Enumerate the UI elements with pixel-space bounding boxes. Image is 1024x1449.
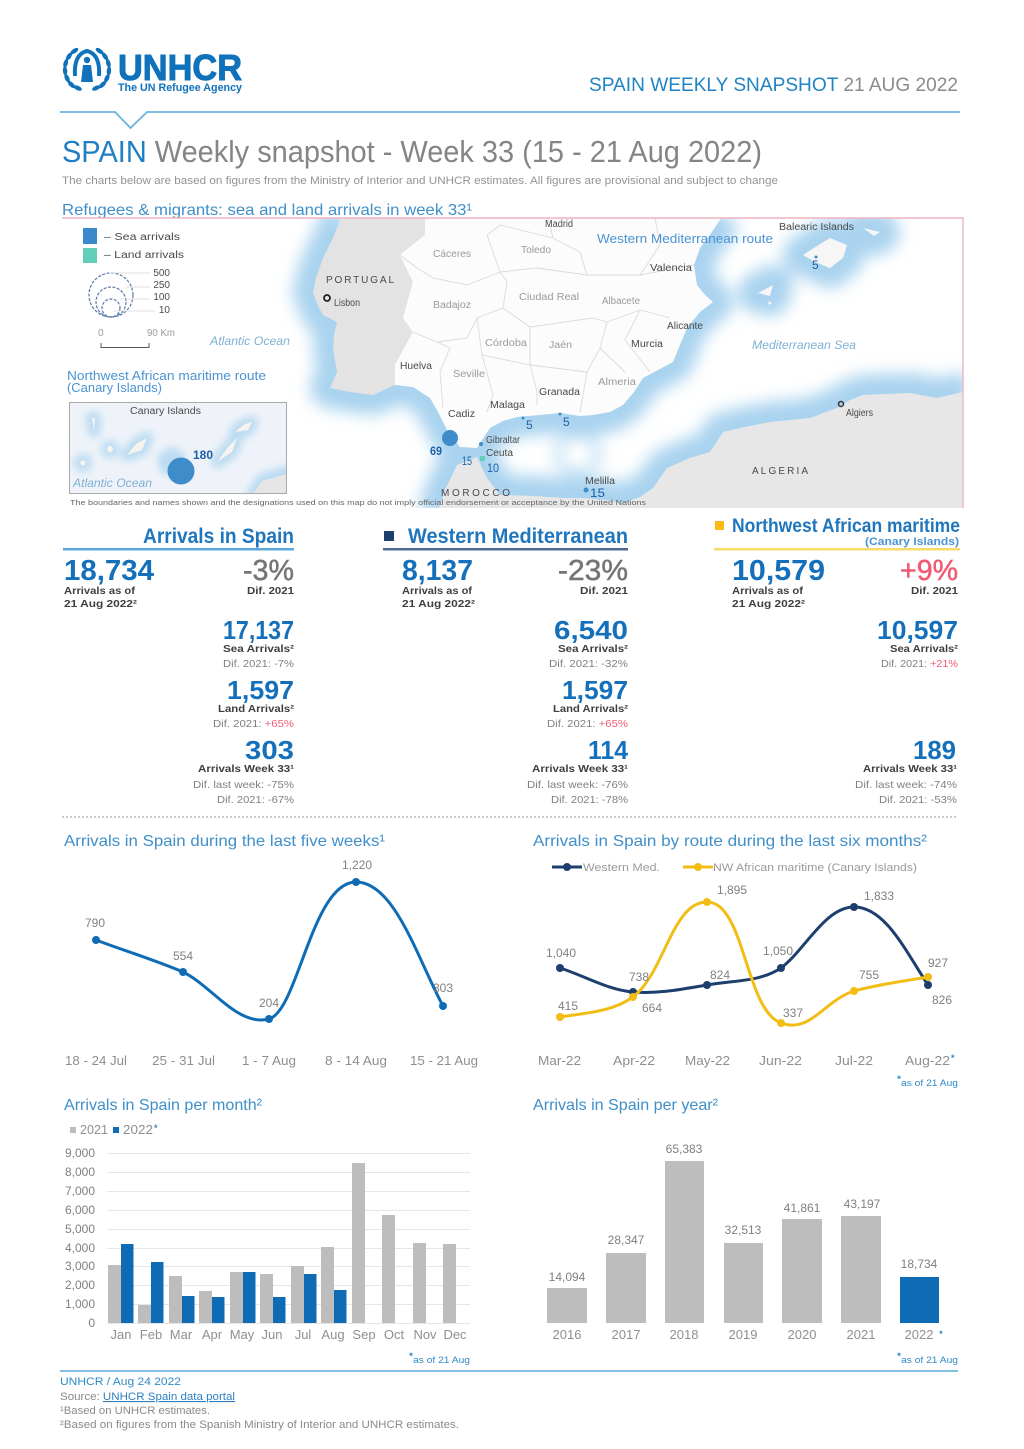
inset map: Canary Islands: 180 [193, 448, 213, 462]
legend: * [154, 1123, 158, 1133]
x axis labels: 2022 [905, 1327, 933, 1342]
icon: UNHCR emblem [62, 47, 112, 92]
y axis and grid: 5,000 [65, 1222, 95, 1236]
total arrivals [64, 555, 154, 610]
y axis and grid: 4,000 [65, 1241, 95, 1255]
weekly arrivals: Dif. 2021: -78% [551, 794, 628, 806]
weekly arrivals [193, 735, 295, 806]
inset map: Canary Islands: Atlantic Ocean [72, 476, 152, 490]
label: Northwest African route: Northwest African maritime route [67, 368, 266, 383]
land arrivals: Land Arrivals² [218, 704, 295, 715]
heading: Arrivals in Spain [143, 525, 294, 548]
weekly arrivals: Arrivals Week 33¹ [198, 764, 295, 775]
sea arrivals: Dif. 2021: +21% [881, 658, 958, 670]
x axis labels: May [230, 1327, 255, 1342]
data labels: 415 [558, 999, 578, 1013]
series: NW African maritime [556, 898, 932, 1027]
sea arrivals: Sea Arrivals² [223, 644, 295, 655]
map labels: cities and countries [326, 219, 873, 499]
x axis labels [553, 1327, 943, 1342]
x axis labels: Dec [443, 1327, 467, 1342]
map labels: cities and countries: Albacete [602, 296, 640, 307]
map labels: seas and routes [597, 231, 856, 352]
weekly arrivals: 189 [913, 735, 956, 765]
note: * [897, 1351, 902, 1361]
legend: proportional circles: 100 [153, 292, 170, 303]
total arrivals: 21 Aug 2022² [64, 599, 138, 610]
data labels: 1,220 [342, 858, 372, 872]
footnote 1: ¹Based on UNHCR estimates. [60, 1405, 210, 1417]
map symbols: arrival figures: 5 [812, 258, 819, 272]
footer rule [60, 1370, 958, 1372]
data labels: 65,383 [666, 1142, 703, 1156]
weekly arrivals: Dif. last week: -74% [855, 779, 957, 791]
bars 2022 [121, 1244, 346, 1323]
land arrivals: Dif. 2021: +65% [213, 718, 294, 730]
legend: scale bar [98, 328, 175, 348]
legend: proportional circles [89, 268, 170, 317]
panel: line chart by route [533, 833, 958, 1088]
panel: Western Mediterranean [383, 525, 629, 806]
x axis labels: 2019 [729, 1327, 757, 1342]
legend: scale bar: 0 [98, 328, 104, 339]
x axis labels [65, 1053, 478, 1068]
source: Source: UNHCR Spain data portal [60, 1391, 235, 1403]
map base with sea glow and land [313, 215, 970, 515]
map labels: seas and routes: Western Mediterranean route [597, 231, 773, 246]
data labels: 303 [433, 981, 453, 995]
x axis labels: Aug-22 [905, 1053, 950, 1068]
map labels: cities and countries: ALGERIA [752, 466, 808, 477]
x axis labels [538, 1053, 955, 1068]
map frame [62, 218, 963, 508]
logo wordmark: UNHCR [118, 47, 242, 88]
sea arrivals [223, 615, 295, 670]
map labels: cities and countries: Valencia [650, 263, 692, 274]
x axis labels: Feb [140, 1327, 162, 1342]
map labels: cities and countries: PORTUGAL [326, 275, 394, 286]
x axis labels: 2020 [788, 1327, 816, 1342]
legend: Western Med. [583, 862, 660, 874]
weekly arrivals: Arrivals Week 33¹ [863, 764, 958, 775]
subtitle: The charts below are based on figures from the Ministry of Interior and UNHCR estimates. All figures are provisional and subject to change [62, 175, 778, 187]
note: as of 21 Aug [901, 1355, 958, 1365]
weekly arrivals: Dif. 2021: -53% [879, 794, 957, 806]
series: Western Mediterranean [556, 903, 932, 996]
chart heading: Arrivals in Spain per month² [64, 1097, 263, 1114]
chart heading: Arrivals in Spain by route during the last six months² [533, 833, 928, 850]
x axis labels: 25 - 31 Jul [152, 1053, 215, 1068]
legend: 2021 [80, 1122, 108, 1137]
x axis labels: 8 - 14 Aug [325, 1053, 387, 1068]
data labels: 41,861 [784, 1201, 821, 1215]
difference 2021: -3% [243, 555, 294, 587]
heading: (Canary Islands) [865, 536, 959, 548]
weekly arrivals: 114 [588, 735, 629, 765]
date line: UNHCR / Aug 24 2022 [60, 1376, 181, 1388]
legend: proportional circles: 500 [153, 268, 170, 279]
label: Atlantic Ocean: Atlantic Ocean [209, 334, 290, 348]
data labels: 14,094 [549, 1270, 586, 1284]
panel: arrivals map [62, 215, 970, 515]
chart heading: Arrivals in Spain per year² [533, 1097, 719, 1114]
bars 2021 [108, 1163, 456, 1323]
total arrivals: Arrivals as of [732, 586, 804, 597]
map symbols: arrival figures [324, 256, 844, 500]
map symbols: arrival figures: 15 [462, 454, 472, 468]
x axis labels: * [939, 1329, 943, 1339]
weekly arrivals: Dif. last week: -75% [193, 779, 294, 791]
x axis labels: Mar [170, 1327, 193, 1342]
map labels: cities and countries: Madrid [545, 219, 573, 230]
legend: 2022 [123, 1122, 153, 1137]
x axis labels: Jul [295, 1327, 311, 1342]
y axis and grid: 7,000 [65, 1184, 95, 1198]
x axis labels: 2017 [612, 1327, 640, 1342]
heading: Western Mediterranean [408, 525, 628, 548]
data labels: 43,197 [844, 1197, 881, 1211]
x axis labels: Sep [352, 1327, 376, 1342]
panel: bars per month [64, 1097, 470, 1365]
map labels: cities and countries: Melilla [585, 476, 615, 487]
y axis and grid: 8,000 [65, 1165, 95, 1179]
sea arrivals: Dif. 2021: -7% [223, 658, 294, 670]
map labels: cities and countries: Lisbon [334, 298, 360, 309]
land arrivals: 1,597 [227, 675, 294, 705]
x axis labels: 2021 [847, 1327, 875, 1342]
y axis and grid: 2,000 [65, 1278, 95, 1292]
x axis labels: Nov [413, 1327, 437, 1342]
data labels: 927 [928, 956, 948, 970]
sea arrivals [549, 615, 629, 670]
x axis labels: Apr-22 [613, 1053, 655, 1068]
x axis labels: 15 - 21 Aug [410, 1053, 478, 1068]
heading [714, 516, 960, 550]
footer notes [60, 1376, 459, 1431]
sea arrivals: Sea Arrivals² [890, 644, 959, 655]
map labels: seas and routes: Mediterranean Sea [752, 338, 856, 352]
sea arrivals: Dif. 2021: -32% [549, 658, 628, 670]
map labels: cities and countries: Almeria [598, 377, 636, 388]
note: * [897, 1074, 902, 1084]
map symbols: arrival figures: 5 [563, 415, 570, 429]
difference 2021: -23% [558, 555, 628, 587]
x axis labels: 18 - 24 Jul [65, 1053, 127, 1068]
difference 2021: Dif. 2021 [580, 586, 629, 597]
legend: scale bar: 90 Km [147, 328, 175, 339]
x axis labels: * [951, 1053, 955, 1063]
legend: NW African maritime (Canary Islands) [713, 862, 917, 874]
x axis labels: Jul-22 [835, 1053, 873, 1068]
legend: symbol colours: – Sea arrivals [104, 232, 180, 243]
line series [92, 878, 447, 1023]
map labels: cities and countries: Toledo [521, 245, 551, 256]
total arrivals [402, 555, 476, 610]
data labels: 1,833 [864, 889, 894, 903]
data labels: 824 [710, 968, 730, 982]
x axis labels: 2016 [553, 1327, 581, 1342]
map labels: cities and countries: Murcia [631, 339, 663, 350]
data labels: 32,513 [725, 1223, 762, 1237]
title: SPAIN Weekly snapshot - Week 33 (15 - 21 Aug 2022) [62, 134, 762, 169]
x axis labels: Jan [111, 1327, 131, 1342]
map labels: cities and countries: Ceuta [486, 448, 513, 459]
label: Northwest African route [67, 368, 266, 395]
x axis labels: Aug [321, 1327, 345, 1342]
data labels [85, 858, 453, 1010]
legend [70, 1122, 158, 1137]
map labels: cities and countries: Balearic Islands [779, 222, 854, 233]
map labels: cities and countries: Jaén [549, 340, 572, 351]
x axis labels [111, 1327, 467, 1342]
map labels: cities and countries: Badajoz [433, 300, 471, 311]
panel: bars per year [533, 1097, 958, 1365]
land arrivals: Dif. 2021: +65% [547, 718, 628, 730]
weekly arrivals [527, 735, 629, 806]
weekly arrivals: Dif. 2021: -67% [217, 794, 294, 806]
data labels: 1,050 [763, 944, 793, 958]
difference 2021: Dif. 2021 [911, 586, 958, 597]
legend: symbol colours: – Land arrivals [104, 250, 184, 261]
chart heading: Arrivals in Spain during the last five weeks¹ [64, 833, 385, 850]
UNHCR logo [62, 47, 243, 94]
data labels: 554 [173, 949, 193, 963]
inset map: Canary Islands [70, 402, 290, 500]
x axis labels: Apr [202, 1327, 223, 1342]
map symbols: arrival figures: 10 [487, 461, 499, 475]
map symbols: arrival figures: 5 [526, 418, 533, 432]
y axis and grid: 6,000 [65, 1203, 95, 1217]
total arrivals: 8,137 [402, 555, 473, 587]
data labels: 664 [642, 1001, 662, 1015]
weekly arrivals: 303 [245, 735, 294, 765]
data labels: 755 [859, 968, 879, 982]
total arrivals: 10,579 [732, 555, 825, 587]
x axis labels: 2018 [670, 1327, 698, 1342]
logo tagline: The UN Refugee Agency [118, 82, 243, 94]
map labels: cities and countries: Córdoba [485, 338, 527, 349]
sea arrivals: Sea Arrivals² [558, 644, 629, 655]
land arrivals [547, 675, 629, 730]
weekly arrivals: Dif. last week: -76% [527, 779, 628, 791]
map labels: cities and countries: Algiers [846, 408, 873, 419]
total arrivals: 21 Aug 2022² [402, 599, 476, 610]
map symbols: arrival figures: 69 [430, 444, 442, 458]
data labels: 1,040 [546, 946, 576, 960]
panel: arrivals in Spain [63, 525, 295, 806]
heading: Northwest African maritime [732, 516, 960, 537]
data labels: 28,347 [608, 1233, 645, 1247]
sea arrivals [877, 615, 959, 670]
map disclaimer: The boundaries and names shown and the designations used on this map do not imply official endorsement or acceptance by the United Nations [70, 498, 646, 507]
total arrivals: 18,734 [64, 555, 154, 587]
label: Northwest African route: (Canary Islands) [67, 380, 162, 395]
y axis and grid [65, 1146, 470, 1330]
weekly arrivals [855, 735, 958, 806]
y axis and grid: 1,000 [65, 1297, 95, 1311]
map heading: Refugees & migrants: sea and land arrivals in week 33¹ [62, 202, 472, 219]
weekly arrivals: Arrivals Week 33¹ [532, 764, 629, 775]
x axis labels: Oct [384, 1327, 404, 1342]
x axis labels: 1 - 7 Aug [242, 1053, 296, 1068]
note: as of 21 Aug [413, 1355, 470, 1365]
total arrivals: 21 Aug 2022² [732, 599, 806, 610]
y axis and grid: 9,000 [65, 1146, 95, 1160]
footnote 2: ²Based on figures from the Spanish Ministry of Interior and UNHCR estimates. [60, 1419, 459, 1431]
land arrivals [213, 675, 295, 730]
data labels: 18,734 [901, 1257, 938, 1271]
note: as of 21 Aug [901, 1078, 958, 1088]
sea arrivals: 10,597 [877, 615, 958, 645]
x axis labels: Mar-22 [538, 1053, 581, 1068]
legend: proportional circles: 250 [153, 280, 170, 291]
legend: proportional circles: 10 [159, 305, 170, 316]
land arrivals: 1,597 [562, 675, 628, 705]
header label: SPAIN WEEKLY SNAPSHOT 21 AUG 2022 [589, 75, 958, 96]
map symbols: arrival figures: 15 [590, 486, 605, 500]
map labels: cities and countries: Alicante [667, 321, 703, 332]
data labels [546, 883, 952, 1020]
sea arrivals: 17,137 [223, 615, 294, 645]
map labels: cities and countries: MOROCCO [441, 488, 510, 499]
data labels: 337 [783, 1006, 803, 1020]
map labels: cities and countries: Seville [453, 369, 485, 380]
panel: Northwest African maritime [714, 516, 960, 806]
legend: symbol colours [83, 228, 184, 263]
sea arrivals: 6,540 [554, 615, 628, 645]
map labels: cities and countries: Ciudad Real [519, 292, 579, 303]
legend [552, 862, 917, 874]
header rule with chevron [60, 112, 960, 128]
data labels: 204 [259, 996, 279, 1010]
difference 2021: Dif. 2021 [247, 586, 294, 597]
total arrivals: Arrivals as of [64, 586, 136, 597]
y axis and grid: 0 [88, 1316, 95, 1330]
map labels: cities and countries: Huelva [400, 361, 432, 372]
map labels: cities and countries: Cáceres [433, 249, 471, 260]
total arrivals [732, 555, 825, 610]
data labels [549, 1142, 938, 1284]
data labels: 790 [85, 916, 105, 930]
x axis labels: May-22 [685, 1053, 730, 1068]
inset map: Canary Islands: Canary Islands [130, 406, 201, 417]
data labels: 738 [629, 970, 649, 984]
y axis and grid: 3,000 [65, 1259, 95, 1273]
data labels: 1,895 [717, 883, 747, 897]
map labels: cities and countries: Cadiz [448, 409, 475, 420]
map labels: cities and countries: Malaga [490, 400, 525, 411]
total arrivals: Arrivals as of [402, 586, 473, 597]
panel: line chart five weeks [64, 833, 478, 1068]
data labels: 826 [932, 993, 952, 1007]
bars [547, 1161, 939, 1323]
x axis labels: Jun [262, 1327, 282, 1342]
difference 2021: +9% [900, 555, 958, 587]
map labels: cities and countries: Gibraltar [486, 435, 521, 446]
x axis labels: Jun-22 [759, 1053, 802, 1068]
note: * [409, 1351, 414, 1361]
map labels: cities and countries: Granada [539, 387, 580, 398]
land arrivals: Land Arrivals² [553, 704, 629, 715]
